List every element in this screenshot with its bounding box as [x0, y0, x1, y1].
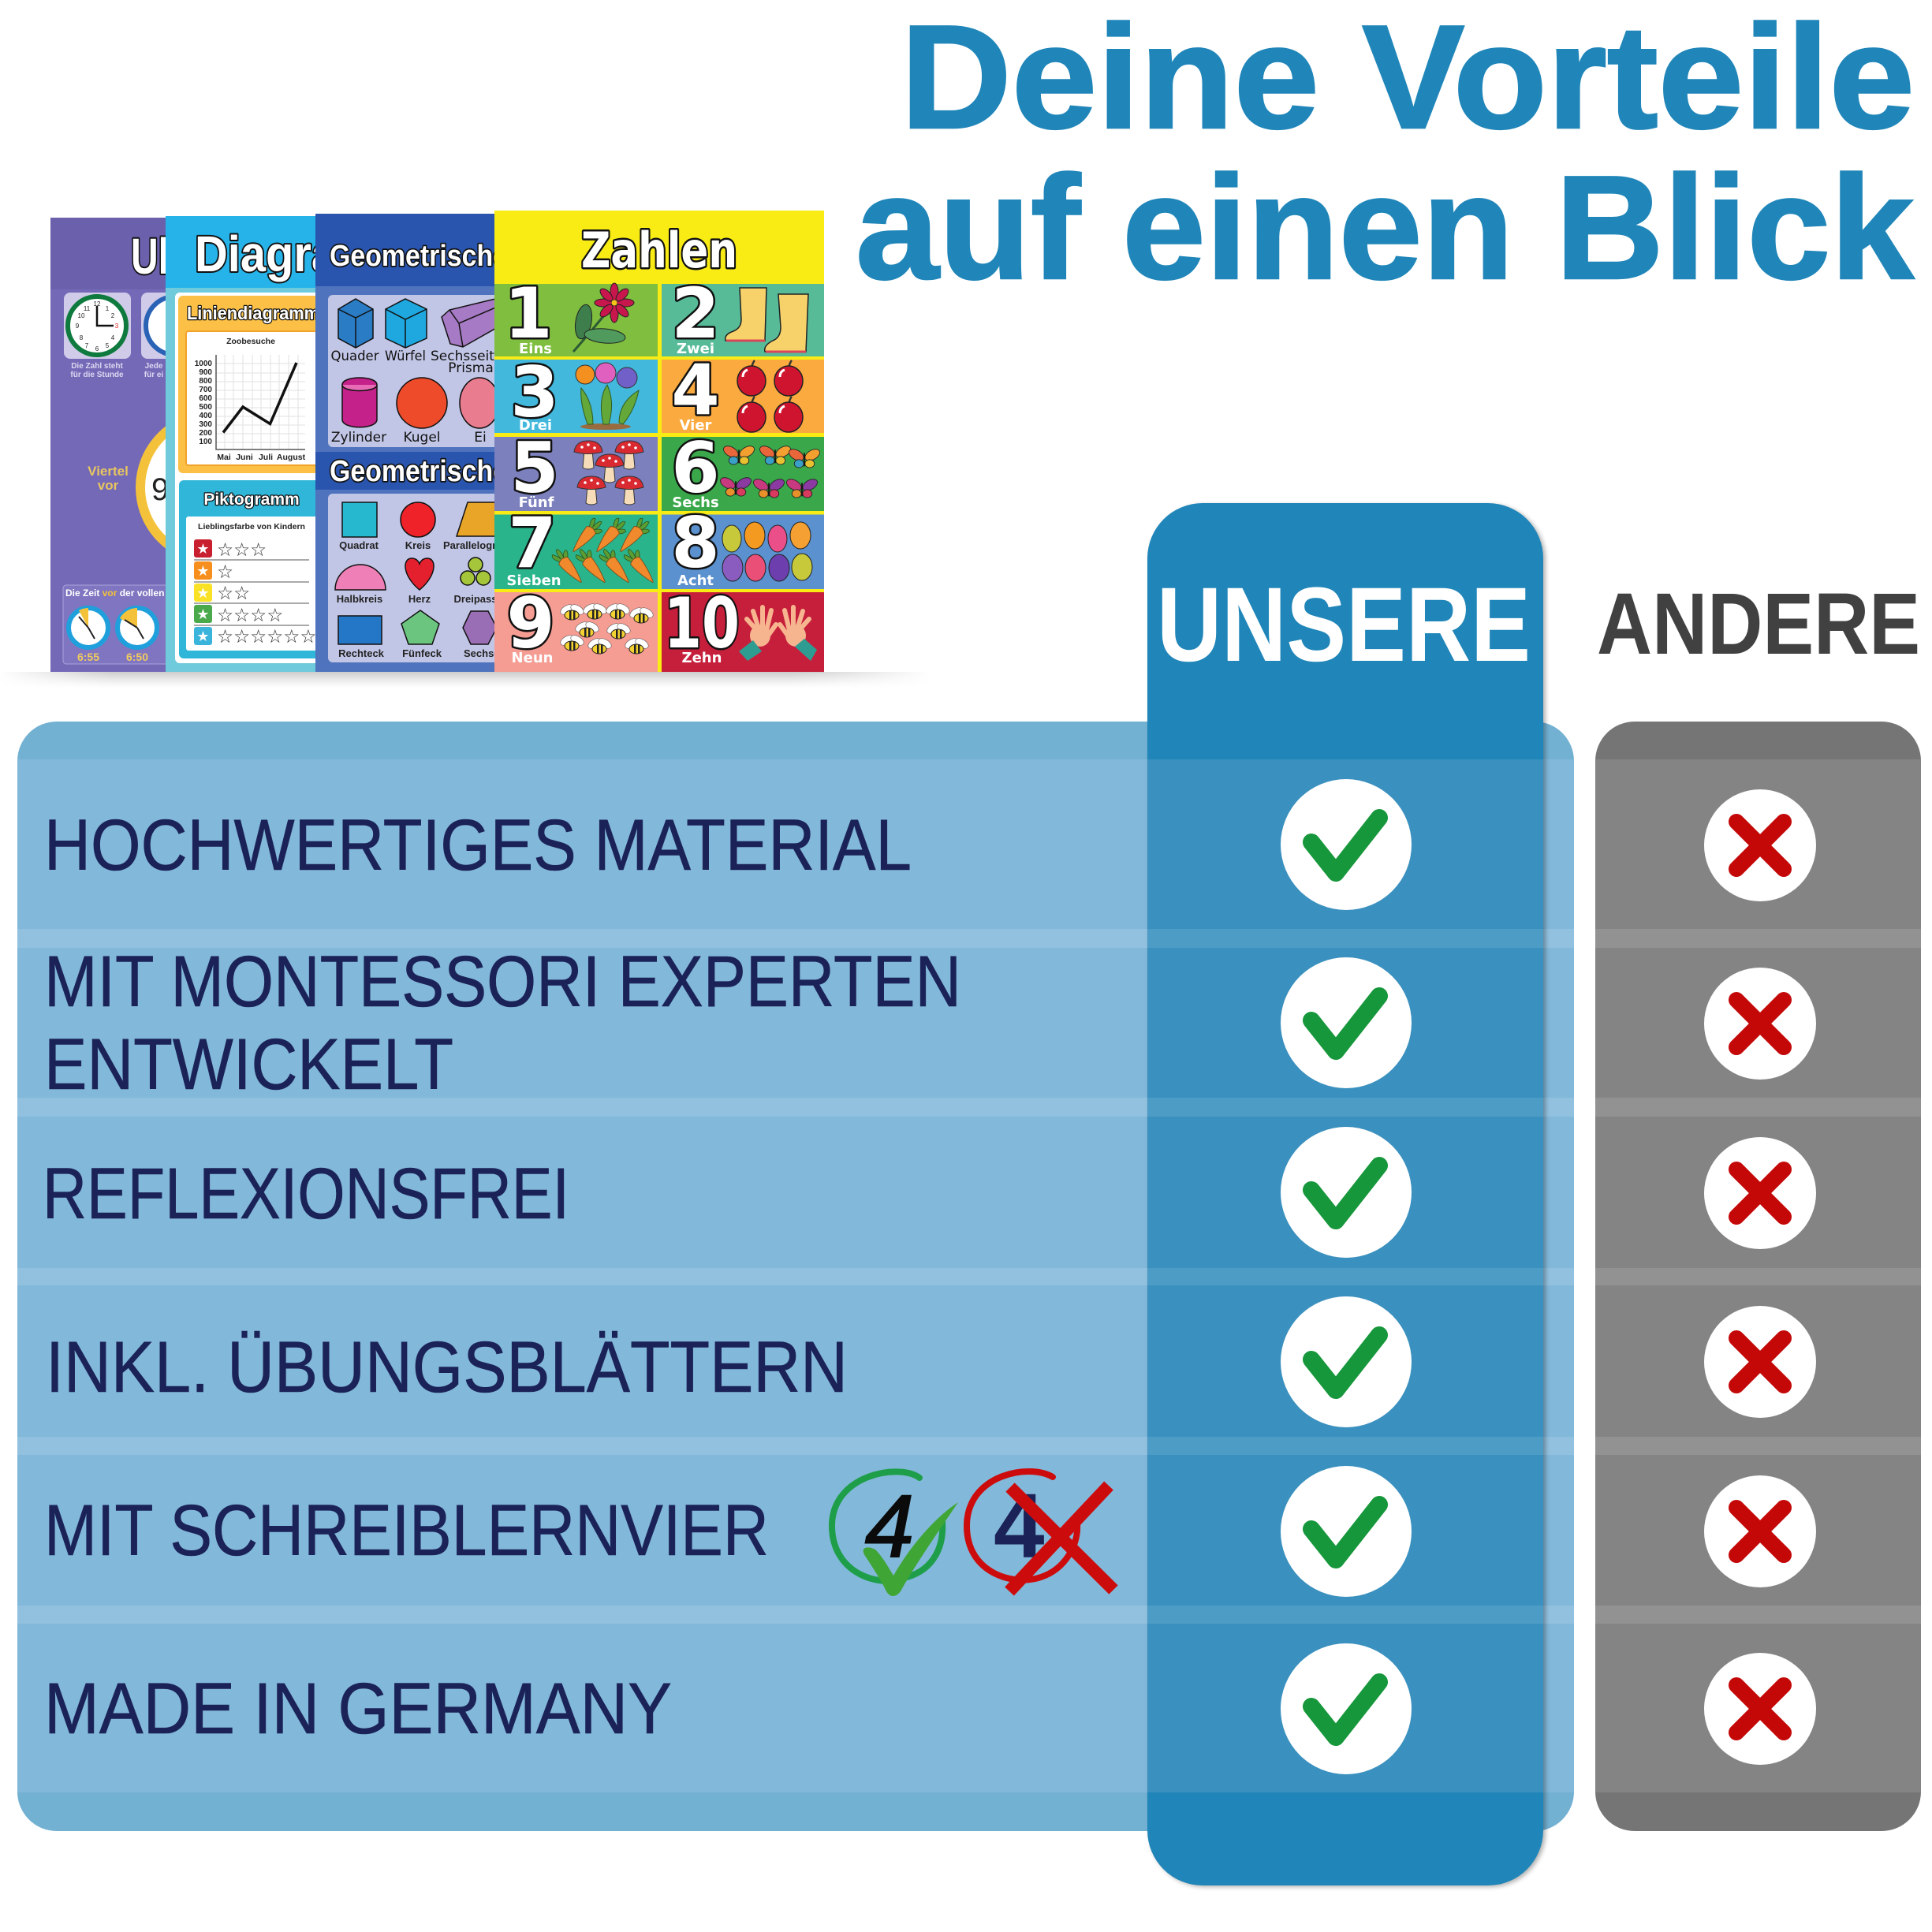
clock tiles: 12 — [94, 300, 101, 308]
panel: ANDERE column — [1595, 722, 1921, 1831]
3D shapes panel: Ei — [474, 430, 487, 446]
title — [856, 0, 1915, 310]
time panel: Die Zeit vor der vollen — [65, 587, 164, 599]
line chart panel: Juni — [236, 453, 253, 462]
3D shapes panel: Quader — [331, 349, 379, 364]
line chart panel: 900 — [199, 368, 212, 377]
line chart panel: Juli — [259, 453, 273, 462]
clock tiles — [64, 293, 166, 359]
number words: Sechs — [672, 494, 719, 511]
clock tiles: 7 — [85, 342, 89, 349]
time panel: 6:55 — [77, 651, 99, 663]
numerals: 6 — [671, 427, 720, 509]
feature labels: MIT SCHREIBLERNVIER — [44, 1490, 769, 1571]
feature labels: INKL. ÜBUNGSBLÄTTERN — [46, 1327, 848, 1408]
poster: Uhr — [50, 218, 166, 672]
label: Viertel vor: Viertel — [88, 464, 129, 479]
2D shapes panel: Kreis — [405, 539, 431, 551]
icon: check 5 — [1281, 1466, 1412, 1597]
2D shapes panel: Herz — [408, 593, 431, 605]
clock captions: für die Stunde — [70, 371, 124, 379]
2D shapes panel: Fünfeck — [402, 647, 442, 659]
clock captions — [71, 363, 162, 377]
number words: Eins — [519, 341, 552, 357]
icon: check 1 — [1281, 779, 1412, 910]
icon: check 2 — [1281, 957, 1412, 1088]
poster title: Zahlen — [581, 222, 737, 279]
line chart panel: August — [277, 453, 306, 462]
icon: butterflies — [718, 444, 822, 498]
number words: Sieben — [506, 573, 561, 589]
icon: check 3 — [1281, 1127, 1412, 1258]
line chart panel: 800 — [199, 377, 212, 386]
number words: Fünf — [519, 494, 554, 511]
clock tiles: 2 — [111, 312, 115, 319]
clock tiles: 8 — [80, 334, 84, 341]
3D shapes panel: Sechsseitiges — [431, 349, 522, 364]
big clock — [136, 426, 166, 549]
clock tiles: 6 — [95, 345, 99, 352]
column heading: UNSERE — [1157, 566, 1531, 684]
2D shapes panel — [328, 494, 494, 662]
pictogram panel: ☆ — [217, 561, 233, 583]
line chart panel: Mai — [217, 453, 231, 462]
column rows — [1147, 759, 1543, 1792]
2D shapes panel: Dreipass — [454, 593, 497, 605]
feature labels: MIT MONTESSORI EXPERTEN — [44, 942, 961, 1022]
clock tiles: 10 — [78, 312, 85, 319]
clock tiles: 4 — [111, 334, 115, 341]
pictogram panel: ☆☆ — [217, 582, 250, 604]
icon: bees — [559, 602, 655, 654]
numerals: 8 — [671, 502, 720, 584]
icon: cross 5 — [1704, 1475, 1816, 1587]
number words: Vier — [680, 417, 712, 434]
icon: apples — [737, 360, 803, 432]
number words — [506, 341, 722, 666]
icon: mushrooms — [574, 441, 643, 505]
pictogram panel: Lieblingsfarbe von Kindern — [198, 522, 305, 531]
line chart panel: 200 — [199, 429, 212, 438]
icon: cross 2 — [1704, 968, 1816, 1080]
pictogram panel: ☆☆☆☆☆☆ — [217, 625, 316, 647]
clock tiles: 3 — [115, 323, 119, 330]
line chart panel: Zoobesuche — [226, 337, 275, 346]
pictogram panel: ★ — [196, 563, 210, 580]
clock tiles: 1 — [106, 305, 110, 312]
time panel: 6:50 — [126, 651, 148, 663]
numerals: 3 — [510, 352, 559, 433]
clock captions: Jede — [145, 362, 163, 371]
pictogram panel: ☆☆☆☆ — [217, 604, 283, 626]
number words: Acht — [677, 573, 714, 589]
feature rows — [17, 759, 1574, 1792]
icon: hands — [739, 607, 817, 661]
row separators — [17, 929, 1574, 1624]
poster: Diagramme — [166, 216, 315, 672]
numerals — [504, 273, 740, 664]
icon: wrong printed four — [967, 1471, 1113, 1591]
time panel — [63, 585, 173, 664]
line chart panel: 400 — [199, 412, 212, 420]
poster title: Uh — [131, 228, 181, 285]
title: auf einen Blick — [856, 145, 1915, 310]
numerals: 4 — [671, 349, 720, 431]
feature labels: MADE IN GERMANY — [44, 1669, 672, 1749]
pictogram panel: ★ — [196, 585, 210, 602]
2D shapes panel: Halbkreis — [337, 593, 382, 605]
line chart panel: Liniendiagramm — [187, 303, 319, 323]
numerals: 10 — [664, 583, 740, 664]
2D shapes panel: Rechteck — [338, 647, 385, 659]
numerals: 5 — [510, 427, 559, 509]
3D shapes panel: Kugel — [403, 430, 441, 446]
line chart panel: 500 — [199, 403, 212, 412]
clock tiles: 5 — [106, 342, 110, 349]
number words: Drei — [519, 417, 552, 434]
numerals: 2 — [671, 273, 720, 354]
feature labels: HOCHWERTIGES MATERIAL — [44, 805, 912, 886]
feature labels: ENTWICKELT — [44, 1024, 453, 1105]
2D shapes panel: Quadrat — [339, 539, 379, 551]
icon: wrong printed four: 4 — [994, 1475, 1045, 1577]
icon: cross 6 — [1704, 1653, 1816, 1765]
pictogram panel: ★ — [196, 628, 210, 645]
icon: cross 1 — [1704, 789, 1816, 901]
number words: Zehn — [682, 650, 722, 666]
number words: Zwei — [677, 341, 714, 357]
icon: cross 3 — [1704, 1137, 1816, 1249]
poster heading 1: Geometrische — [330, 240, 508, 273]
3D shapes panel: Würfel — [385, 349, 426, 364]
clock captions: Die Zahl steht — [71, 362, 123, 371]
clock tiles: 9 — [76, 323, 80, 330]
pictogram panel: Piktogramm — [203, 490, 300, 509]
number cells — [494, 284, 824, 672]
numerals: 9 — [506, 583, 555, 664]
icon: carrots — [550, 517, 660, 586]
number words: Neun — [512, 650, 553, 666]
3D shapes panel: Zylinder — [331, 430, 386, 446]
icon: eggs — [722, 522, 812, 581]
icon: flower — [573, 283, 634, 352]
icon: cross 4 — [1704, 1306, 1816, 1418]
icon: check 4 — [1281, 1296, 1412, 1427]
label: Viertel vor — [88, 466, 128, 490]
2D shapes panel: Parallelogramm — [443, 539, 520, 551]
line chart panel: 300 — [199, 420, 212, 429]
poster: Geometrische Formen — [315, 214, 494, 672]
feature labels — [43, 805, 961, 1749]
pictogram panel: ★ — [196, 541, 210, 558]
panel: features background — [17, 722, 1574, 1831]
line chart panel: 700 — [199, 386, 212, 394]
line chart panel: 600 — [199, 394, 212, 403]
feature labels: REFLEXIONSFREI — [43, 1154, 569, 1234]
3D shapes panel: Prisma — [448, 360, 494, 376]
2D shapes panel: Sechseck — [464, 647, 512, 659]
poster shadow — [0, 670, 931, 689]
icon: boots — [725, 288, 808, 352]
icon: correct handwritten four — [832, 1471, 958, 1596]
pictogram panel: ★ — [196, 606, 210, 623]
big clock: 9 — [151, 472, 169, 507]
icon: check 6 — [1281, 1643, 1412, 1774]
clock captions: für ei — [144, 371, 163, 379]
line chart panel: 1000 — [195, 360, 212, 368]
pictogram panel — [179, 480, 329, 658]
icon: correct handwritten four: 4 — [865, 1477, 914, 1576]
numerals: 7 — [508, 502, 557, 584]
poster: Zahlen — [494, 211, 824, 673]
3D shapes panel — [328, 295, 494, 447]
numerals: 1 — [504, 273, 553, 354]
clock tiles: 11 — [84, 305, 91, 312]
panel: UNSERE column — [1147, 503, 1546, 1887]
gray rows — [1595, 759, 1921, 1792]
line chart panel: 100 — [199, 438, 212, 446]
poster title: Diagra — [195, 226, 337, 282]
icon: tulips — [576, 363, 639, 430]
pictogram panel: ☆☆☆ — [217, 539, 267, 561]
poster heading 2: Geometrische — [330, 455, 508, 488]
label: Viertel vor: vor — [98, 478, 119, 493]
line chart panel — [178, 296, 328, 473]
